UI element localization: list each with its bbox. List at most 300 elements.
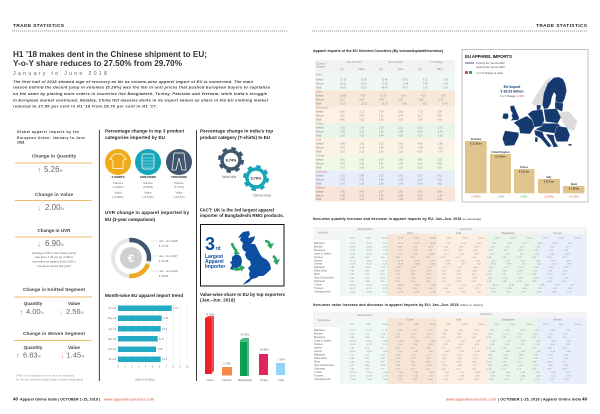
table title: Item-wise quantity increase and decrease in apparel imports by EU: Jan.-Jun. 2018 (in pieces/kg) bbox=[313, 217, 481, 221]
bar labels: (-2.40%) bbox=[471, 196, 481, 198]
icon: t-shirts bbox=[105, 149, 131, 175]
table rows: 28.18 27.91 -0.95 5.86 5.36 -8.53 1.43 1.31 -8.39 5.42 5.66 4.42 0.71 0.79 11.2 bbox=[350, 372, 571, 374]
table rows: Nightwear bbox=[314, 266, 325, 269]
section: Bangladesh: Knitted bbox=[316, 110, 324, 114]
footer: right page: www.apparelresources.com bbox=[446, 398, 496, 402]
table rows: 10.42 10.91 4.70 4.16 4.22 1.44 0.23 0.25 8.69 0.92 1.11 20.6 0.40 0.48 20.0 bbox=[350, 250, 569, 252]
fact box bbox=[200, 224, 284, 286]
gear labels: Value falls bbox=[222, 175, 237, 179]
bar value labels: China bbox=[206, 378, 214, 382]
section: World: World bbox=[316, 74, 323, 76]
map panel: EU apparel imports bbox=[462, 50, 588, 202]
section: India: 1.59 2.19 1.60 2.02 0.63 -7.76 bbox=[340, 150, 443, 154]
table title: Apparel imports of the EU Selected Countries (By volume&quantities/value) bbox=[313, 49, 443, 53]
bar chart: 5 bbox=[152, 366, 154, 368]
table rows: 3.46 3.48 0.57 1.18 1.08 -8.47 0.17 0.18 5.88 0.26 0.29 11.5 0.08 0.09 12.5 bbox=[350, 362, 567, 364]
table rows bbox=[314, 329, 571, 381]
section: World: 30.18 17.98 31.48 16.91 4.31 -5.95 bbox=[340, 78, 449, 82]
fact text: FACT: UK is the 3rd largest apparel bbox=[200, 208, 274, 212]
table rows: 4.12 4.01 -2.66 1.30 1.16 -10.7 0.17 0.14 -17.6 0.52 0.54 3.84 0.06 0.07 16.6 bbox=[350, 354, 569, 356]
section: Turkey: Woven bbox=[316, 130, 324, 134]
bar value labels: 5.78% bbox=[223, 362, 231, 366]
footer: right page: 49 bbox=[582, 396, 588, 402]
stat: woven segment: Quantity bbox=[24, 345, 43, 350]
category figures: TROUSERS bbox=[171, 175, 187, 179]
heading: Percentage change in top 3 product bbox=[105, 128, 184, 134]
stat: knitted segment bbox=[14, 287, 92, 316]
bar chart: 6.19 bbox=[162, 328, 167, 331]
footer: left page bbox=[13, 396, 154, 402]
bar value labels bbox=[205, 312, 285, 382]
section: Bangladesh: Total bbox=[316, 118, 322, 122]
panel heading: European Union: January to June bbox=[17, 136, 85, 140]
donut legend: € 18.60 bbox=[159, 274, 169, 278]
table header and tints: Items/Qty bbox=[318, 232, 329, 234]
section: Vietnam bbox=[316, 154, 442, 170]
category figures: (7.17%) bbox=[174, 185, 184, 189]
section: Turkey: 3.24 4.19 3.44 4.08 6.17 -2.63 bbox=[340, 134, 443, 138]
table rows: 4.28 4.51 5.37 1.96 1.88 -4.08 0.19 0.21 10.5 0.51 0.57 11.7 0.09 0.10 11.1 bbox=[350, 274, 567, 276]
stat: knitted segment: Change in Knitted Segment bbox=[23, 287, 85, 292]
table rows: Brassieres bbox=[314, 249, 326, 252]
heading bbox=[200, 292, 286, 302]
bar chart: May-18 bbox=[108, 317, 117, 320]
bar value labels: Vietnam bbox=[222, 378, 233, 382]
section: Cambodia: Cambodia bbox=[316, 170, 328, 174]
table rows: Babywear bbox=[314, 329, 325, 332]
map label: EU Import bbox=[504, 85, 521, 89]
section: Pakistan: Pakistan bbox=[316, 186, 326, 190]
table header and tints: India bbox=[456, 318, 462, 322]
source note: (The information here are extracted bbox=[16, 374, 74, 378]
table rows: 7.66 8.01 4.56 2.42 2.35 -2.89 0.85 0.80 -5.88 1.81 1.96 8.28 0.14 0.16 14.2 bbox=[350, 271, 568, 273]
header: right page: TRADE STATISTICS bbox=[536, 23, 588, 29]
section: China: 10.65 4.97 10.20 4.34 -4.21 -12.6 bbox=[340, 94, 447, 98]
stat: change in UVR: 6.90% bbox=[45, 239, 64, 248]
table rows: Coats & Jackets bbox=[314, 252, 332, 255]
source note bbox=[16, 374, 83, 382]
section: Pakistan: 1.30 1.13 1.47 1.18 13.0 4.42 bbox=[340, 198, 442, 201]
bar chart: Mar-18 bbox=[108, 338, 117, 341]
bar chart: Feb-18 bbox=[108, 348, 117, 351]
category figures: SWEATERS bbox=[140, 175, 156, 179]
bar chart bbox=[108, 304, 189, 382]
table rows: Brassieres bbox=[314, 336, 326, 339]
bar labels: € 3.71 bn bbox=[544, 180, 555, 184]
table header and tints: China bbox=[407, 232, 414, 235]
section: Vietnam: Vietnam bbox=[316, 154, 325, 158]
map legend bbox=[465, 62, 505, 75]
stat: change in quantity bbox=[15, 154, 92, 174]
icon: trousers bbox=[166, 149, 192, 175]
map legend: Import by EU, Jan-Jun 2018 bbox=[476, 66, 505, 69]
bar chart: 5.76 bbox=[159, 338, 164, 341]
table rows: Dresses bbox=[314, 343, 324, 346]
bar chart: 9 bbox=[179, 366, 181, 368]
fact text bbox=[200, 208, 284, 218]
stat: knitted segment: ↑ bbox=[20, 308, 23, 316]
section: Pakistan: Knitted bbox=[316, 190, 324, 194]
section: Cambodia: 0.29 0.50 0.33 0.52 13.8 4.00 bbox=[340, 178, 442, 182]
bar chart: 2 bbox=[131, 366, 133, 368]
table header: Jan-Jun 2018 bbox=[388, 61, 403, 64]
intro paragraph: in European market continued. Notably, China felt massive dents in its export values as share in the EU clothing market bbox=[13, 98, 269, 102]
table rows: 8.46 8.22 -2.83 2.10 1.92 -8.57 0.64 0.60 -6.25 1.47 1.55 5.44 0.16 0.17 6.25 bbox=[350, 358, 569, 360]
table rows: 9.02 8.48 -5.98 2.96 2.52 -14.8 0.09 0.08 -11.1 0.37 0.38 2.70 0.24 0.24 0.00 bbox=[350, 365, 569, 367]
category figures: Volume bbox=[143, 181, 153, 185]
heading: (Jan.-Jun. 2018) bbox=[200, 298, 236, 302]
table rows: Hosiery bbox=[314, 259, 323, 262]
stat: knitted segment: Quantity bbox=[24, 301, 43, 306]
icon: gear volume rises: 3.76% bbox=[251, 176, 262, 180]
panel: month-wise import trend bbox=[105, 293, 189, 382]
section: Cambodia: Woven bbox=[316, 178, 324, 182]
table rows: 13.34 13.98 4.80 4.87 4.46 -8.42 1.02 0.95 -6.86 2.18 2.48 13.7 0.28 0.31 10.7 bbox=[350, 246, 571, 248]
stat: change in quantity: Change in Quantity bbox=[32, 154, 76, 158]
category figures: Volume bbox=[113, 181, 123, 185]
table rows: Undergarments bbox=[314, 378, 331, 381]
table rows: Skirts bbox=[314, 360, 321, 364]
section: Cambodia: Total bbox=[316, 182, 322, 186]
stat: change in quantity: 5.26% bbox=[44, 165, 63, 174]
footer: right page bbox=[446, 396, 588, 402]
table rows: Blouses bbox=[314, 246, 323, 248]
section: India: Knitted bbox=[316, 142, 324, 146]
section: World bbox=[316, 74, 449, 90]
stat: change in UVR: Change in UVR bbox=[38, 228, 71, 233]
bar chart: 1 bbox=[124, 366, 126, 368]
section: Bangladesh: Woven bbox=[316, 114, 324, 118]
callout: 3rd largest importer: Importer bbox=[205, 264, 225, 270]
table rows: 8.26 8.91 7.86 3.80 3.92 3.15 0.41 0.40 -2.43 0.48 0.53 10.4 0.22 0.26 18.1 bbox=[350, 257, 567, 259]
callout: 3rd largest importer: Apparel bbox=[205, 259, 224, 265]
panel heading: Global apparel imports by the bbox=[17, 130, 79, 134]
section: Pakistan: Woven bbox=[316, 194, 324, 198]
table rows: 7.92 8.14 2.77 3.21 3.12 -2.80 0.14 0.15 7.14 0.18 0.22 22.2 0.07 0.08 14.2 bbox=[350, 348, 567, 350]
stat: knitted segment: ↓ bbox=[60, 308, 63, 316]
stat: woven segment bbox=[14, 331, 92, 360]
table: item-wise quantity bbox=[313, 217, 587, 296]
fact text: importer of Bangladeshi RMG products. bbox=[200, 213, 284, 218]
table header bbox=[315, 60, 455, 73]
bar value labels: 47.00% bbox=[205, 312, 215, 316]
table rows: 2.94 3.02 2.72 1.16 1.10 -5.17 0.02 0.02 0.00 0.14 0.17 21.4 0.05 0.05 0.00 bbox=[350, 368, 567, 370]
table rows: Hosiery bbox=[314, 346, 323, 350]
UVR note bbox=[32, 251, 77, 268]
intro paragraph bbox=[13, 79, 271, 108]
section: Vietnam: Knitted bbox=[316, 158, 324, 162]
table rows: Dresses bbox=[314, 256, 324, 259]
panel: global apparel imports summary bbox=[14, 130, 92, 382]
stat: change in value: Change in Value bbox=[35, 192, 73, 197]
heading: categories imported by EU bbox=[105, 135, 166, 140]
intro paragraph: The first half of 2018 showed sign of recovery as far as volume-wise apparel import of EU is concerned. The main bbox=[13, 79, 254, 84]
section: Turkey: Knitted bbox=[316, 126, 324, 130]
table header and tints: Import from bbox=[460, 228, 472, 231]
section: China: Woven bbox=[316, 98, 324, 102]
map legend: Y-o-Y % Change (in value) bbox=[476, 73, 503, 75]
map label: Y-o-Y Change -1.00% bbox=[500, 95, 525, 98]
table header and tints: Vietnam bbox=[553, 232, 562, 235]
UVR note: was Euro 7.43 per kg of fabric bbox=[35, 255, 74, 259]
table rows: Jerseys bbox=[314, 263, 323, 266]
bar value labels: Turkey bbox=[260, 378, 269, 382]
table rows: 20.11 21.56 7.21 10.76 10.27 -4.55 1.26 1.16 -7.93 3.58 3.82 6.70 0.81 0.92 13.5 bbox=[350, 243, 573, 245]
stat: change in quantity: ↑ bbox=[37, 166, 41, 174]
bar labels: € 1.98 bn bbox=[569, 188, 580, 190]
table rows: Shirts (Men) bbox=[314, 270, 327, 273]
heading bbox=[200, 128, 273, 140]
table header and tints: 2017 2018 %Chg 2017 2018 %Chg 2017 2018 %Chg 2017 2018 %Chg 2017 2018 %Chg bbox=[350, 238, 581, 240]
heading: Percentage change in India's top bbox=[200, 128, 273, 134]
section: World: Total bbox=[316, 86, 322, 90]
title: H1 ’18 makes dent in the Chinese shipment to EU; bbox=[13, 50, 207, 59]
bar labels: 0.99% bbox=[521, 196, 528, 198]
panel heading bbox=[17, 130, 85, 144]
section: Turkey: Total bbox=[316, 134, 322, 138]
bar labels: € 5.22 bn bbox=[519, 170, 530, 174]
table header and tints: India bbox=[456, 232, 462, 235]
table rows: Nightwear bbox=[314, 354, 325, 356]
intro paragraph: on the same by placing more orders in countries like Bangladesh, Turkey, Pakistan and Vietnam, while India's struggle bbox=[13, 91, 268, 96]
section: Bangladesh: 1.81 2.60 2.01 2.74 11.0 5.38 bbox=[340, 114, 442, 118]
stat: change in value bbox=[15, 192, 92, 212]
table rows: 5.90 5.64 -4.40 2.28 2.04 -10.5 0.11 0.10 -9.09 0.43 0.46 6.97 0.18 0.19 5.55 bbox=[350, 278, 569, 280]
UVR note: the same period last year) bbox=[37, 264, 71, 268]
table header and tints: Global imports bbox=[357, 314, 373, 317]
bar value labels: India bbox=[278, 378, 284, 382]
section: Cambodia: 1.44 1.38 1.59 1.43 10.4 3.62 bbox=[340, 182, 442, 186]
section: Bangladesh bbox=[316, 106, 442, 122]
bar labels: (-4.10%) bbox=[569, 196, 579, 198]
table rows: 6.48 6.60 1.85 2.32 2.20 -5.17 0.13 0.14 7.69 0.52 0.60 15.3 0.27 0.31 14.8 bbox=[350, 337, 567, 339]
stat: knitted segment: Value bbox=[68, 301, 80, 306]
donut legend: € 16.48 bbox=[159, 259, 169, 263]
callout: 3rd largest importer: Largest bbox=[205, 254, 223, 260]
heading: UVR change in apparel imported by bbox=[105, 210, 189, 215]
section: World: 15.91 18.12 17.00 17.86 6.83 -1.45 bbox=[340, 82, 449, 86]
bar value labels: Bangladesh bbox=[238, 378, 253, 382]
table header and tints bbox=[313, 312, 587, 384]
bar value labels: 14.46% bbox=[259, 348, 269, 352]
section: China: 16.77 10.52 16.18 9.60 -3.51 -8.74 bbox=[340, 102, 448, 106]
panel frame bbox=[462, 50, 588, 202]
UVR note: equivalent as against Euro 8.28 in bbox=[32, 259, 76, 263]
category figures: Volume bbox=[174, 181, 184, 185]
bar chart: 7.78 bbox=[173, 307, 178, 310]
bar chart: 8 bbox=[173, 366, 175, 368]
section: World: Woven bbox=[316, 82, 324, 86]
table rows: Blouses bbox=[314, 332, 323, 336]
section: Cambodia: Knitted bbox=[316, 174, 324, 178]
table rows: 9.24 9.13 -1.19 3.07 2.72 -11.4 1.08 0.95 -12.0 1.03 1.14 10.6 0.19 0.21 10.5 bbox=[350, 334, 569, 336]
table rows: 40.57 42.11 3.79 9.82 9.36 -4.68 0.66 0.61 -7.57 13.10 13.95 6.48 1.12 1.22 8.92 bbox=[350, 288, 573, 290]
UVR note: (Average UVR in the review period bbox=[32, 251, 77, 255]
donut legend: Jan - Jun 2017 bbox=[159, 254, 178, 258]
table header and tints: Bangladesh bbox=[502, 232, 515, 235]
bar labels: Germany bbox=[471, 138, 482, 141]
table rows: Swimwear bbox=[314, 280, 325, 283]
section: Pakistan: 0.92 0.62 1.07 0.68 16.3 9.68 bbox=[340, 190, 442, 194]
map legend: Import by EU, Jan-Jun 2018 bbox=[476, 62, 505, 65]
table rows: Coats & Jackets bbox=[314, 340, 332, 342]
table rows: Swimwear bbox=[314, 368, 325, 370]
category figures: Value bbox=[114, 190, 122, 194]
bar chart: 0 bbox=[117, 366, 119, 368]
section: India: 0.98 1.03 1.02 0.99 4.08 -3.88 bbox=[340, 142, 443, 146]
bar chart: Jan-18 bbox=[108, 358, 117, 361]
stat: change in value: ↓ bbox=[37, 204, 41, 212]
footer: right page: | OCTOBER 1-15, 2018 | Apparel Online India bbox=[498, 398, 582, 402]
bar chart: 6.21 bbox=[162, 358, 167, 361]
panel: value-wise share by top exporters bbox=[200, 292, 286, 382]
footer: left page: Apparel Online India | OCTOBER 1-15, 2018 | bbox=[20, 398, 100, 402]
bar chart: 3 bbox=[138, 366, 140, 368]
panel: top 3 product categories bbox=[105, 128, 192, 199]
source note: for H1 & volumes have been further analysed) bbox=[16, 378, 83, 382]
category figures: (0.05%) bbox=[143, 185, 153, 189]
gear labels bbox=[222, 175, 272, 198]
table rows: 12.82 12.94 0.93 4.42 4.26 -3.61 0.27 0.27 0.00 2.34 2.46 5.12 0.22 0.25 13.6 bbox=[350, 379, 570, 381]
table rows: 60.14 63.02 4.78 15.60 15.20 -2.56 2.14 2.10 -1.86 14.50 15.88 9.51 0.94 1.05 11.7 bbox=[350, 284, 575, 286]
table header and tints: Import from bbox=[480, 313, 492, 316]
category figures: T-SHIRTS bbox=[111, 175, 125, 179]
table rows: Shirts (Men) bbox=[314, 357, 327, 360]
category figures bbox=[111, 175, 187, 199]
donut legend bbox=[151, 239, 178, 278]
section: Vietnam: 0.61 0.66 0.67 0.68 9.84 3.03 bbox=[340, 158, 442, 162]
column dividers bbox=[99, 130, 197, 381]
table rows: 34.62 33.15 -4.24 8.70 7.82 -10.1 0.98 0.94 -4.08 4.66 4.89 4.93 1.26 1.31 3.96 bbox=[350, 351, 571, 353]
donut legend: Jan - Jun 2018 bbox=[159, 239, 178, 243]
table header: Y-Y Change bbox=[430, 61, 443, 64]
table rows: 9.92 10.20 2.82 3.86 3.70 -4.14 0.37 0.33 -10.8 1.60 1.72 7.50 0.12 0.13 8.33 bbox=[350, 267, 569, 269]
icon: sweaters bbox=[135, 149, 161, 175]
map: non-EU countries bbox=[532, 76, 577, 137]
table rows: 3.72 3.88 4.30 2.04 1.96 -3.92 0.03 0.03 0.00 0.28 0.33 17.8 0.05 0.06 20.0 bbox=[350, 281, 567, 283]
bar labels: France bbox=[520, 166, 529, 169]
section: Vietnam: 0.43 0.83 0.47 0.87 9.30 4.82 bbox=[340, 162, 442, 166]
table header: Qty Value Qty Value Qty Value bbox=[340, 68, 443, 71]
map: EU member states bbox=[502, 77, 572, 147]
category figures: Value bbox=[144, 190, 152, 194]
footer: left page: 40 bbox=[13, 396, 19, 402]
table rows: 26.18 24.40 -6.79 11.60 9.98 -13.9 0.21 0.22 4.76 1.62 1.78 9.87 2.11 2.18 3.31 bbox=[350, 340, 571, 342]
table rows: 32.04 31.26 -2.43 5.96 5.32 -10.7 0.55 0.49 -10.9 9.34 9.72 4.06 1.46 1.50 2.73 bbox=[350, 376, 571, 378]
table rows: 12.41 12.10 -2.50 7.12 6.56 -7.86 0.11 0.12 9.09 1.02 1.16 13.7 0.61 0.66 8.19 bbox=[350, 253, 570, 255]
section: India: Woven bbox=[316, 146, 324, 150]
stat: knitted segment: 4.00% bbox=[26, 307, 44, 316]
callout: 3rd largest importer bbox=[205, 234, 225, 270]
bar value labels: 7.35% bbox=[277, 358, 285, 362]
section: India: 0.61 1.16 0.58 1.03 -4.92 -11.2 bbox=[340, 146, 444, 150]
heading: product category (T-shirts) to EU bbox=[200, 135, 271, 140]
section: World: 46.09 36.10 48.48 34.77 5.26 -2.00 bbox=[340, 86, 449, 90]
table rows: Suits & Ensembles bbox=[314, 364, 335, 367]
stat: change in UVR bbox=[15, 228, 92, 248]
bar chart: Jun-18 bbox=[108, 307, 117, 310]
category figures: (-4.66%) bbox=[112, 185, 124, 189]
stat: woven segment: ↓ bbox=[60, 351, 64, 360]
section: Turkey: 2.15 2.18 2.26 2.12 5.11 -2.75 bbox=[340, 126, 443, 130]
table rows: Babywear bbox=[314, 242, 325, 245]
bar value labels: 24.39% bbox=[240, 332, 250, 336]
callout: 3rd largest importer: 3rd bbox=[205, 234, 221, 254]
table rows: Undergarments bbox=[314, 290, 331, 293]
panel title: EU APPAREL IMPORTS bbox=[465, 54, 512, 59]
section: Pakistan bbox=[316, 186, 443, 201]
section: Turkey bbox=[316, 122, 443, 138]
table header and tints: Bangladesh bbox=[502, 318, 515, 322]
icon: green trade arrows bbox=[232, 241, 280, 272]
section: China: 6.12 5.55 5.98 5.26 -2.28 -5.22 bbox=[340, 98, 444, 102]
map label: € 38.33 billion bbox=[501, 89, 523, 93]
bar chart: 6 bbox=[159, 366, 161, 368]
header: left page: TRADE STATISTICS bbox=[13, 23, 65, 29]
table rows: T-shirts bbox=[314, 371, 323, 374]
table header and tints: Vietnam bbox=[553, 318, 562, 322]
3D bar chart bbox=[205, 316, 285, 376]
section: China bbox=[316, 90, 448, 106]
table header: Country / bbox=[316, 62, 326, 66]
stat: woven segment: 6.83% bbox=[23, 350, 41, 360]
bar labels bbox=[470, 138, 580, 198]
category figures: (-4.47%) bbox=[173, 195, 185, 199]
stat: change in UVR: ↓ bbox=[37, 240, 41, 248]
icon: UK map bbox=[230, 231, 271, 285]
table rows: Trousers bbox=[314, 287, 324, 290]
bar labels: (-3.20%) bbox=[544, 196, 554, 198]
table header and tints bbox=[313, 227, 587, 296]
table rows: 44.19 46.02 4.14 14.30 13.92 -2.65 0.93 0.97 4.30 8.12 8.94 10.1 1.02 1.10 7.84 bbox=[350, 264, 572, 266]
table header and tints: Global imports bbox=[357, 228, 373, 231]
bar labels: United Kingdom bbox=[491, 151, 510, 154]
section: China: China bbox=[316, 90, 323, 94]
panel: UK fact bbox=[200, 208, 284, 286]
stat: woven segment: Value bbox=[68, 345, 80, 350]
panel: UVR donut bbox=[105, 210, 189, 278]
bar chart: Apr-18 bbox=[108, 328, 117, 331]
heading: Value-wise share to EU by top exporters bbox=[200, 292, 286, 297]
table rows: 10.14 10.26 1.18 3.81 3.52 -7.61 0.61 0.53 -13.1 1.22 1.29 5.73 0.41 0.44 7.31 bbox=[350, 330, 571, 332]
donut chart: € bbox=[128, 253, 134, 265]
section: Turkey: Turkey bbox=[316, 122, 324, 126]
table: apparel imports of EU from selected countries bbox=[313, 49, 455, 202]
panel: India's top product category bbox=[200, 128, 273, 198]
bar chart: 4 bbox=[145, 366, 147, 368]
bar chart: 6.33 bbox=[163, 317, 168, 320]
section: Cambodia: 1.15 0.88 1.26 0.91 9.57 3.41 bbox=[340, 174, 442, 178]
table rows bbox=[314, 242, 575, 293]
map label bbox=[500, 85, 525, 98]
table header and tints: China bbox=[407, 318, 414, 322]
section: China: Total bbox=[316, 102, 322, 106]
section: World: Knitted bbox=[316, 78, 324, 82]
category figures: (-3.66%) bbox=[112, 195, 124, 199]
section: Cambodia bbox=[316, 170, 442, 186]
table header and tints: Items/Value bbox=[318, 319, 331, 322]
table header: Jan-Jun 2017 bbox=[347, 61, 362, 64]
bar chart: top EU importers bbox=[465, 141, 584, 193]
footer: left page: www.apparelresources.com bbox=[104, 398, 154, 402]
heading: EU (3-year comparison) bbox=[105, 217, 155, 222]
icon: gear value falls: 8.74% bbox=[226, 158, 237, 162]
table header: Category bbox=[316, 66, 327, 68]
intro paragraph: reduced to 27.50 per cent in H1 '18 from 29.70 per cent in H1 '17. bbox=[13, 104, 157, 108]
section: Turkey: 1.09 2.01 1.18 1.96 8.26 -2.49 bbox=[340, 130, 443, 134]
date line: January to June 2018 bbox=[13, 71, 107, 77]
section: Bangladesh: 6.85 3.71 7.34 3.81 7.15 2.69 bbox=[340, 110, 442, 114]
